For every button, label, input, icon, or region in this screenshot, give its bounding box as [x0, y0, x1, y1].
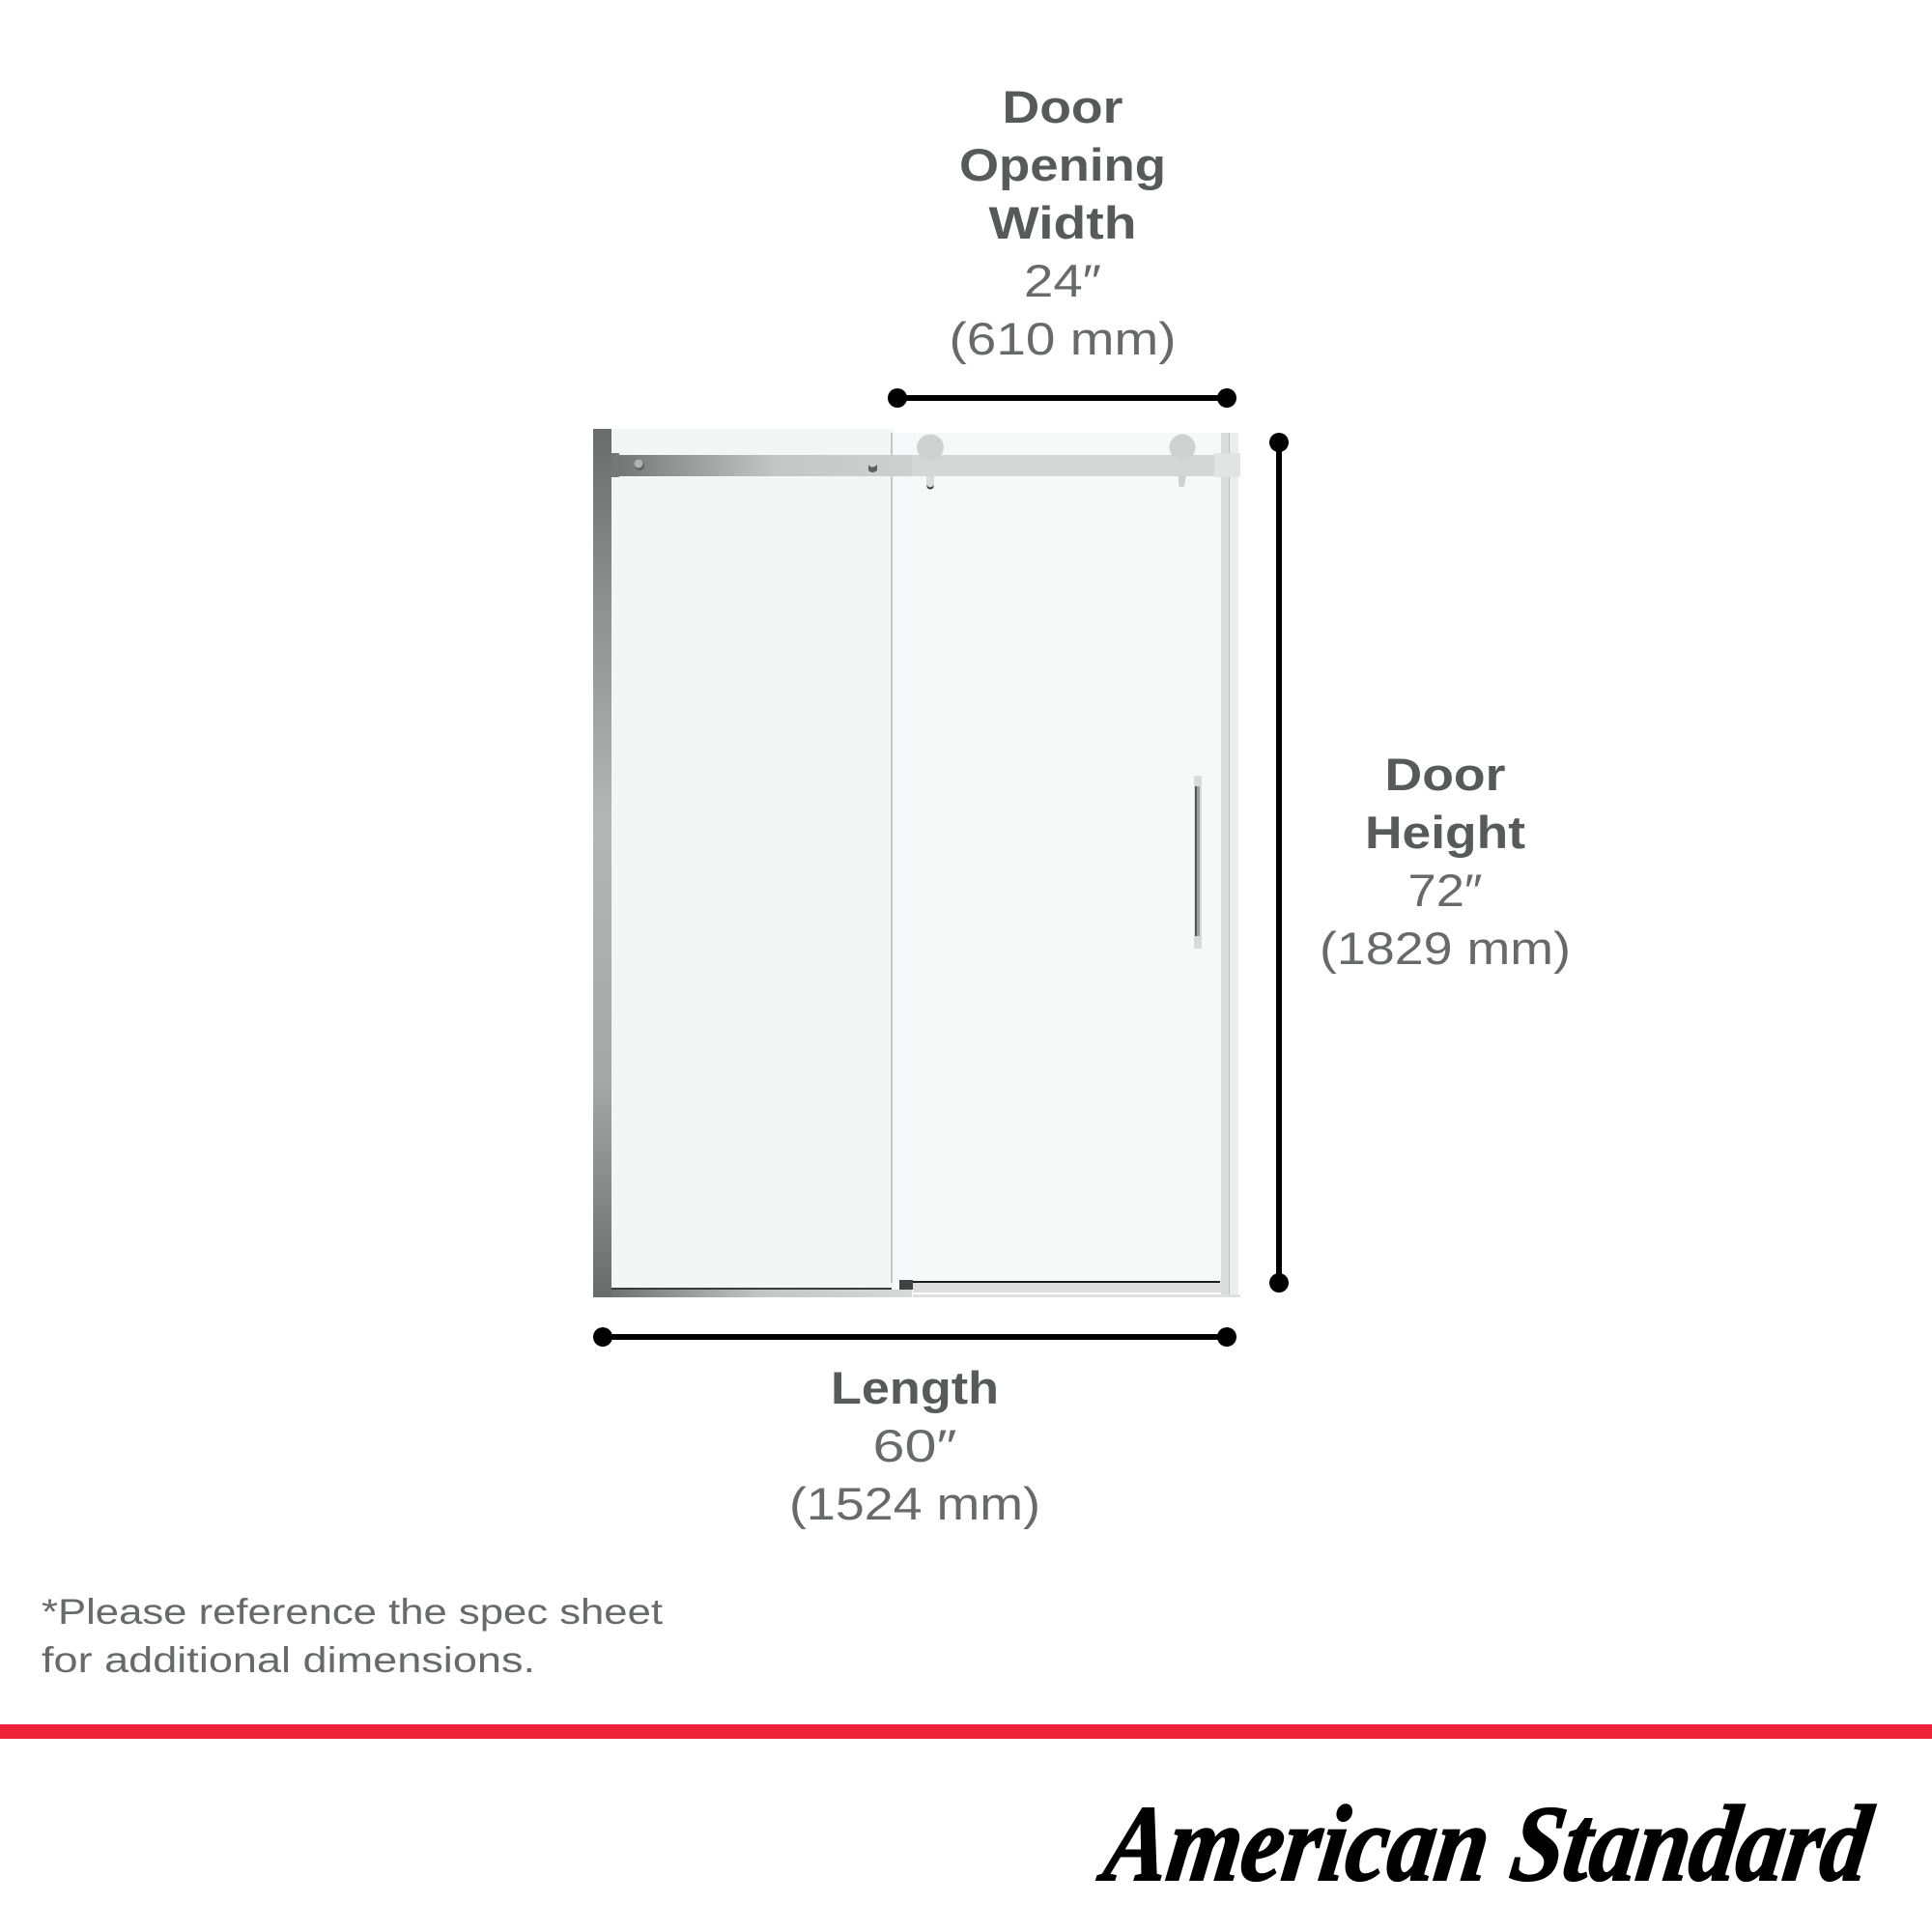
rail end bracket left: [611, 453, 619, 477]
label: door opening width: [949, 81, 1177, 364]
label: door opening width: (610 mm): [949, 313, 1177, 364]
shower door illustration: [593, 429, 1240, 1297]
top rail left section: [611, 455, 912, 476]
roller pin right: [1179, 475, 1186, 487]
left fixed glass panel: [611, 429, 894, 1289]
footnote: *Please reference the spec sheet: [42, 1592, 664, 1632]
label: length: [789, 1362, 1040, 1529]
roller wheel left: [917, 435, 944, 460]
label: door height: Height: [1365, 807, 1525, 858]
red divider bar: [0, 1724, 1932, 1739]
left wall post: [593, 429, 611, 1297]
rail screw right: [868, 465, 877, 472]
roller wheel right: [1169, 435, 1196, 460]
dimension line: door opening width: [888, 388, 1236, 408]
label: door opening width: Width: [989, 197, 1136, 248]
rail end bracket right: [1214, 453, 1240, 477]
glass sheen strip: [895, 433, 913, 1283]
label: length: (1524 mm): [789, 1478, 1040, 1529]
label: door opening width: Opening: [959, 139, 1166, 190]
footnote: for additional dimensions.: [42, 1640, 535, 1680]
label: door height: Door: [1385, 749, 1505, 800]
roller pin left shadow: [926, 485, 934, 489]
label: door opening width: 24″: [1024, 255, 1101, 306]
door handle: [1194, 776, 1202, 949]
bottom track right: [899, 1280, 1240, 1297]
label: door height: (1829 mm): [1320, 923, 1571, 974]
label: door opening width: Door: [1003, 81, 1122, 132]
label: door height: 72″: [1408, 865, 1482, 916]
footnote: [42, 1592, 664, 1680]
label: length: 60″: [873, 1420, 956, 1471]
dimension line: length: [593, 1327, 1236, 1347]
label: door height: [1320, 749, 1571, 974]
roller pin left: [926, 476, 934, 490]
label: length: Length: [831, 1362, 999, 1413]
top rail right section: [912, 455, 1215, 476]
rail screw left: [634, 460, 644, 470]
glass centre edge: [891, 433, 893, 1283]
right sliding glass panel: [894, 433, 1221, 1283]
bottom track left: [611, 1288, 912, 1297]
dimension line: door height: [1269, 433, 1289, 1293]
right wall channel: [1221, 433, 1238, 1294]
